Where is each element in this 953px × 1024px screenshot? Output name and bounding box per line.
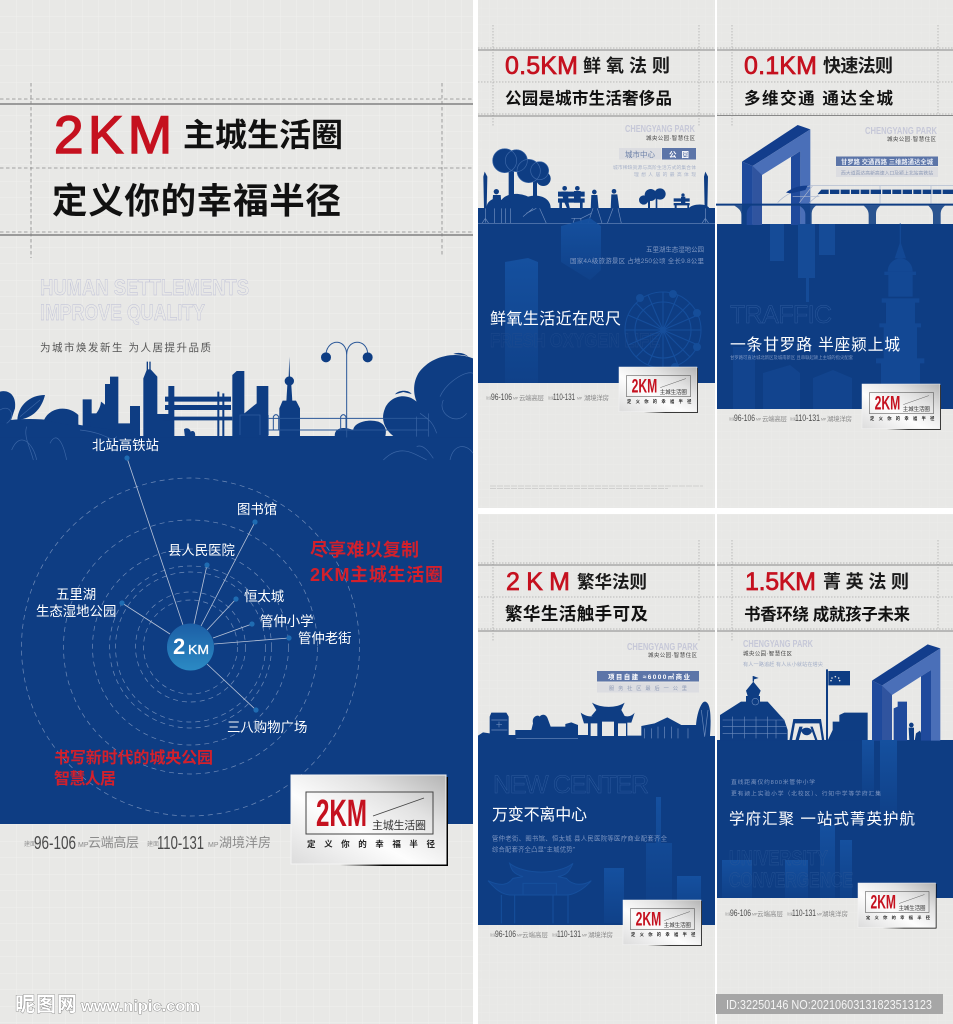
subtitle: 多维交通 通达全城 xyxy=(744,88,894,108)
outlined english xyxy=(729,847,853,892)
price footer: 110-131 xyxy=(553,392,575,403)
faint bottom buildings xyxy=(733,347,852,409)
small description: 理想人居的最高体现 xyxy=(634,171,696,178)
red callout: right: 尽享难以复制 xyxy=(310,539,419,560)
outlined english: FRESH OXYGEN LIFE xyxy=(490,331,660,352)
headline: 一条甘罗路 半座颍上城 xyxy=(730,336,900,354)
brand xyxy=(627,642,699,659)
small description xyxy=(613,164,696,178)
price footer: 湖境洋房 xyxy=(219,835,271,850)
logo card: 2KM xyxy=(636,910,661,931)
price footer: MP xyxy=(752,912,758,916)
road tag: 西大道直达高新高速入口及颍上北站高铁站 xyxy=(841,170,933,176)
price footer: 建面 xyxy=(729,416,735,421)
logo card xyxy=(619,367,698,413)
location labels: 县人民医院 xyxy=(168,543,235,558)
title: 1.5KM: 1.5KM xyxy=(745,568,816,596)
headline: 万变不离中心 xyxy=(492,806,587,824)
price footer: 建面 xyxy=(548,395,554,400)
logo card: 主城生活圈 xyxy=(664,921,691,929)
price footer: 建面 xyxy=(790,416,796,421)
small description: 城市稀缺资源与高阶生活方式的集合体 xyxy=(613,164,696,171)
price footer: 湖境洋房 xyxy=(822,909,848,918)
logo card: 2KM xyxy=(870,892,896,914)
outlined english: CONVERGENCE xyxy=(729,869,853,892)
logo card: 定义你的幸福半径 xyxy=(870,415,935,422)
brand: CHENGYANG PARK xyxy=(625,124,696,135)
title: 繁华法则: 繁华法则 xyxy=(577,572,647,592)
brand: CHENGYANG PARK xyxy=(627,642,699,653)
watermark: nipic xyxy=(15,994,200,1016)
location labels: 管仲小学 xyxy=(260,614,314,629)
price footer: 96-106 xyxy=(730,908,751,919)
price footer: MP xyxy=(517,934,523,938)
location labels: 恒太城 xyxy=(244,589,284,604)
logo card: 定义你的幸福半径 xyxy=(631,931,696,938)
price footer xyxy=(490,929,613,940)
price footer: 云端高层 xyxy=(522,930,548,939)
road tag xyxy=(836,156,938,177)
arch and train illustration xyxy=(716,125,953,225)
small description xyxy=(492,834,668,854)
red callout: right: 2KM主城生活圈 xyxy=(310,564,443,585)
road tag: 甘罗路 交通西路 三维路通达全城 xyxy=(841,157,934,166)
center badge xyxy=(167,624,214,670)
faint buildings xyxy=(604,797,701,923)
commercial tag: 服务社区最后一公里 xyxy=(609,684,687,692)
watermark: nipic: www.nipic.com xyxy=(80,998,200,1015)
price footer: 湖境洋房 xyxy=(827,414,852,423)
heading: 2KM: 2KM xyxy=(54,106,172,165)
park silhouette illustration xyxy=(478,149,715,223)
price footer: 云端高层 xyxy=(88,835,139,850)
logo card: 主城生活圈 xyxy=(372,818,426,832)
logo card: 2KM xyxy=(875,394,900,415)
price footer: 96-106 xyxy=(734,413,755,424)
watermark: image id xyxy=(716,994,943,1014)
logo card: 定义你的幸福半径 xyxy=(627,398,692,405)
title: 2KM: 2KM xyxy=(506,568,570,596)
tag buttons: 公园 xyxy=(669,150,689,159)
ferris wheel xyxy=(625,290,701,371)
panel: 2KM prosperity xyxy=(478,514,715,1024)
logo card xyxy=(291,775,448,866)
price footer: MP xyxy=(208,842,219,849)
brand: 有人一路追赶 有人从小就站在塔尖 xyxy=(743,660,823,668)
location labels: 五里湖 xyxy=(56,587,96,602)
panel: main 2KM poster xyxy=(0,0,473,1024)
headline: 鲜氧生活近在咫尺 xyxy=(490,310,621,328)
small description: 甘罗路可直达城北新区及城南新区 且串联起颍上主城的指尖配套 xyxy=(730,354,854,361)
price footer: 湖境洋房 xyxy=(588,930,613,939)
location labels: 北站高铁站 xyxy=(92,437,159,453)
tag buttons xyxy=(619,148,696,160)
center badge: KM xyxy=(188,642,209,657)
park facts: 五里湖生态湿地公园 xyxy=(646,244,704,254)
panel: 0.5KM fresh oxygen xyxy=(478,0,715,508)
price footer: 建面 xyxy=(725,911,731,916)
outlined english: NEW CENTER xyxy=(493,771,649,799)
brand: 城央公园·智慧住区 xyxy=(648,651,697,659)
small description xyxy=(731,778,881,798)
logo card xyxy=(858,883,936,928)
price footer: MP xyxy=(577,396,583,400)
price footer: 96-106 xyxy=(495,929,516,940)
price footer: 110-131 xyxy=(792,908,816,919)
price footer: 96-106 xyxy=(491,392,512,403)
price footer: 建面 xyxy=(787,911,793,916)
faint gate xyxy=(488,863,591,923)
price footer: 云端高层 xyxy=(519,393,544,402)
outlined english heading: IMPROVE QUALITY xyxy=(40,300,205,325)
outlined english: TRAFFIC xyxy=(730,301,832,329)
small description: 综合配套齐全凸显"主城优势" xyxy=(492,844,575,854)
price footer: MP xyxy=(582,934,588,938)
school silhouette illustration xyxy=(720,644,940,741)
price footer: MP xyxy=(756,418,762,422)
title: 0.1KM: 0.1KM xyxy=(744,52,817,80)
price footer xyxy=(24,833,271,853)
panel: 1.5KM education xyxy=(716,514,953,1024)
outlined english heading xyxy=(40,275,249,325)
slogan: 为城市焕发新生 为人居提升品质 xyxy=(40,341,211,354)
faint reflection bars xyxy=(722,740,897,898)
logo card xyxy=(623,900,702,946)
heading: 定义你的幸福半径: 定义你的幸福半径 xyxy=(52,181,341,221)
panel: 0.1KM traffic xyxy=(716,0,953,508)
logo card: 主城生活圈 xyxy=(660,388,687,396)
title: 菁英法则: 菁英法则 xyxy=(823,571,909,592)
location labels: 三八购物广场 xyxy=(227,720,307,735)
price footer xyxy=(486,392,609,403)
price footer: 110-131 xyxy=(557,929,581,940)
price footer: 建面 xyxy=(486,395,492,400)
headline: 学府汇聚 一站式菁英护航 xyxy=(729,810,915,828)
price footer: MP xyxy=(513,396,519,400)
brand xyxy=(625,124,696,142)
location labels: 生态湿地公园 xyxy=(36,604,116,619)
logo card: 定义你的幸福半径 xyxy=(866,914,931,921)
price footer: 云端高层 xyxy=(757,909,784,918)
price footer: 建面 xyxy=(552,932,558,937)
city skyline illustration xyxy=(0,342,473,460)
price footer: 110-131 xyxy=(795,413,820,424)
subtitle: 书香环绕 成就孩子未来 xyxy=(744,604,910,624)
brand: CHENGYANG PARK xyxy=(743,639,814,650)
blue field xyxy=(717,224,953,409)
price footer xyxy=(729,413,852,424)
heading: 主城生活圈: 主城生活圈 xyxy=(183,117,343,153)
subtitle: 繁华生活触手可及 xyxy=(505,604,648,624)
red callout: left: 书写新时代的城央公园 xyxy=(54,748,213,767)
price footer: 建面 xyxy=(24,840,36,848)
subtitle: 公园是城市生活奢侈品 xyxy=(505,88,672,108)
small description: 直线距离仅约800米管仲小学 xyxy=(731,778,815,786)
brand: 城央公园·智慧住区 xyxy=(887,135,936,143)
outlined english: UNIVERSITY xyxy=(729,847,828,870)
title: 0.5KM: 0.5KM xyxy=(505,52,578,80)
price footer xyxy=(725,908,848,919)
price footer: MP xyxy=(821,418,827,422)
center badge: 2 xyxy=(173,634,185,659)
commercial tag: 项目自建 ≈6000㎡商业 xyxy=(608,672,690,681)
park facts xyxy=(570,244,704,265)
title: 鲜氧法则: 鲜氧法则 xyxy=(583,55,670,76)
blue field xyxy=(0,436,473,824)
price footer: 96-106 xyxy=(34,833,76,853)
logo card xyxy=(862,384,941,430)
brand: 城央公园·智慧住区 xyxy=(646,134,695,142)
price footer: 110-131 xyxy=(157,833,204,853)
park facts: 国家4A级旅游景区 占地250公顷 全长9.8公里 xyxy=(570,256,704,265)
title: 快速法则: 快速法则 xyxy=(823,56,893,76)
watermark: nipic: 昵图网 xyxy=(15,994,77,1016)
logo card: 主城生活圈 xyxy=(898,904,926,912)
blue field xyxy=(478,208,715,383)
pagoda xyxy=(876,223,924,409)
outlined english heading: HUMAN SETTLEMENTS xyxy=(40,275,249,300)
brand xyxy=(743,639,823,668)
city silhouette illustration xyxy=(478,702,711,740)
price footer: 云端高层 xyxy=(762,414,788,423)
radial chart: 2KM ring diagram xyxy=(22,437,360,816)
red callout: right xyxy=(310,539,443,585)
small description: 更有颍上实验小学（北校区）、行知中学等学府汇集 xyxy=(731,790,881,798)
location labels: 图书馆 xyxy=(237,502,277,517)
faint city buildings xyxy=(505,218,601,383)
blue field xyxy=(717,740,953,898)
tag buttons: 城市中心 xyxy=(625,149,656,159)
logo card: 2KM xyxy=(316,793,367,835)
brand xyxy=(865,126,938,143)
red callout: left xyxy=(54,748,213,788)
small description: 管仲老街、图书馆、恒太城 县人民医院等医疗商业配套齐全 xyxy=(492,834,668,842)
brand: 城央公园·智慧住区 xyxy=(743,650,792,658)
logo card: 主城生活圈 xyxy=(903,405,930,413)
location labels: 管仲老街 xyxy=(298,631,352,646)
red callout: left: 智慧人居 xyxy=(54,769,116,788)
faint hanging blocks xyxy=(770,224,835,302)
logo card: 定义你的幸福半径 xyxy=(307,839,435,849)
commercial tag xyxy=(597,671,699,692)
logo card: 2KM xyxy=(632,377,657,398)
location labels xyxy=(36,437,352,735)
blue field xyxy=(478,736,715,925)
price footer: 建面 xyxy=(147,840,159,848)
price footer: 湖境洋房 xyxy=(584,393,609,402)
price footer: MP xyxy=(78,842,89,849)
price footer: MP xyxy=(817,912,823,916)
price footer: 建面 xyxy=(490,932,496,937)
